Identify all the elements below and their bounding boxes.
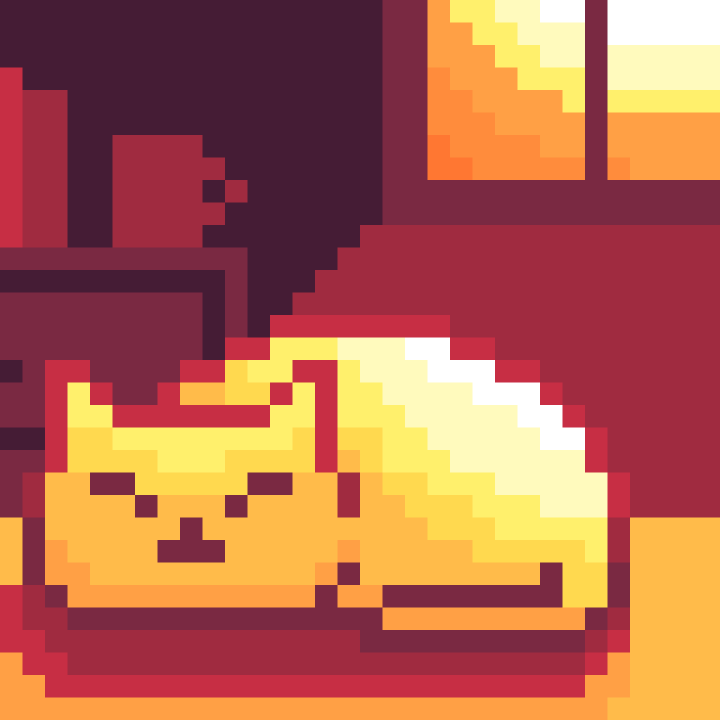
icon: mug on shelf xyxy=(112,135,248,248)
back wall under the window xyxy=(292,225,720,518)
shelf and cabinet xyxy=(0,248,248,518)
window xyxy=(382,0,720,225)
cat xyxy=(45,315,630,608)
floor xyxy=(0,518,720,720)
icon: closed left eye xyxy=(90,472,158,518)
icon: nose and mouth xyxy=(158,518,225,562)
cat back and head fur xyxy=(45,315,630,608)
icon: closed right eye xyxy=(225,472,292,518)
cushion xyxy=(0,472,630,698)
books on shelf xyxy=(0,68,68,248)
